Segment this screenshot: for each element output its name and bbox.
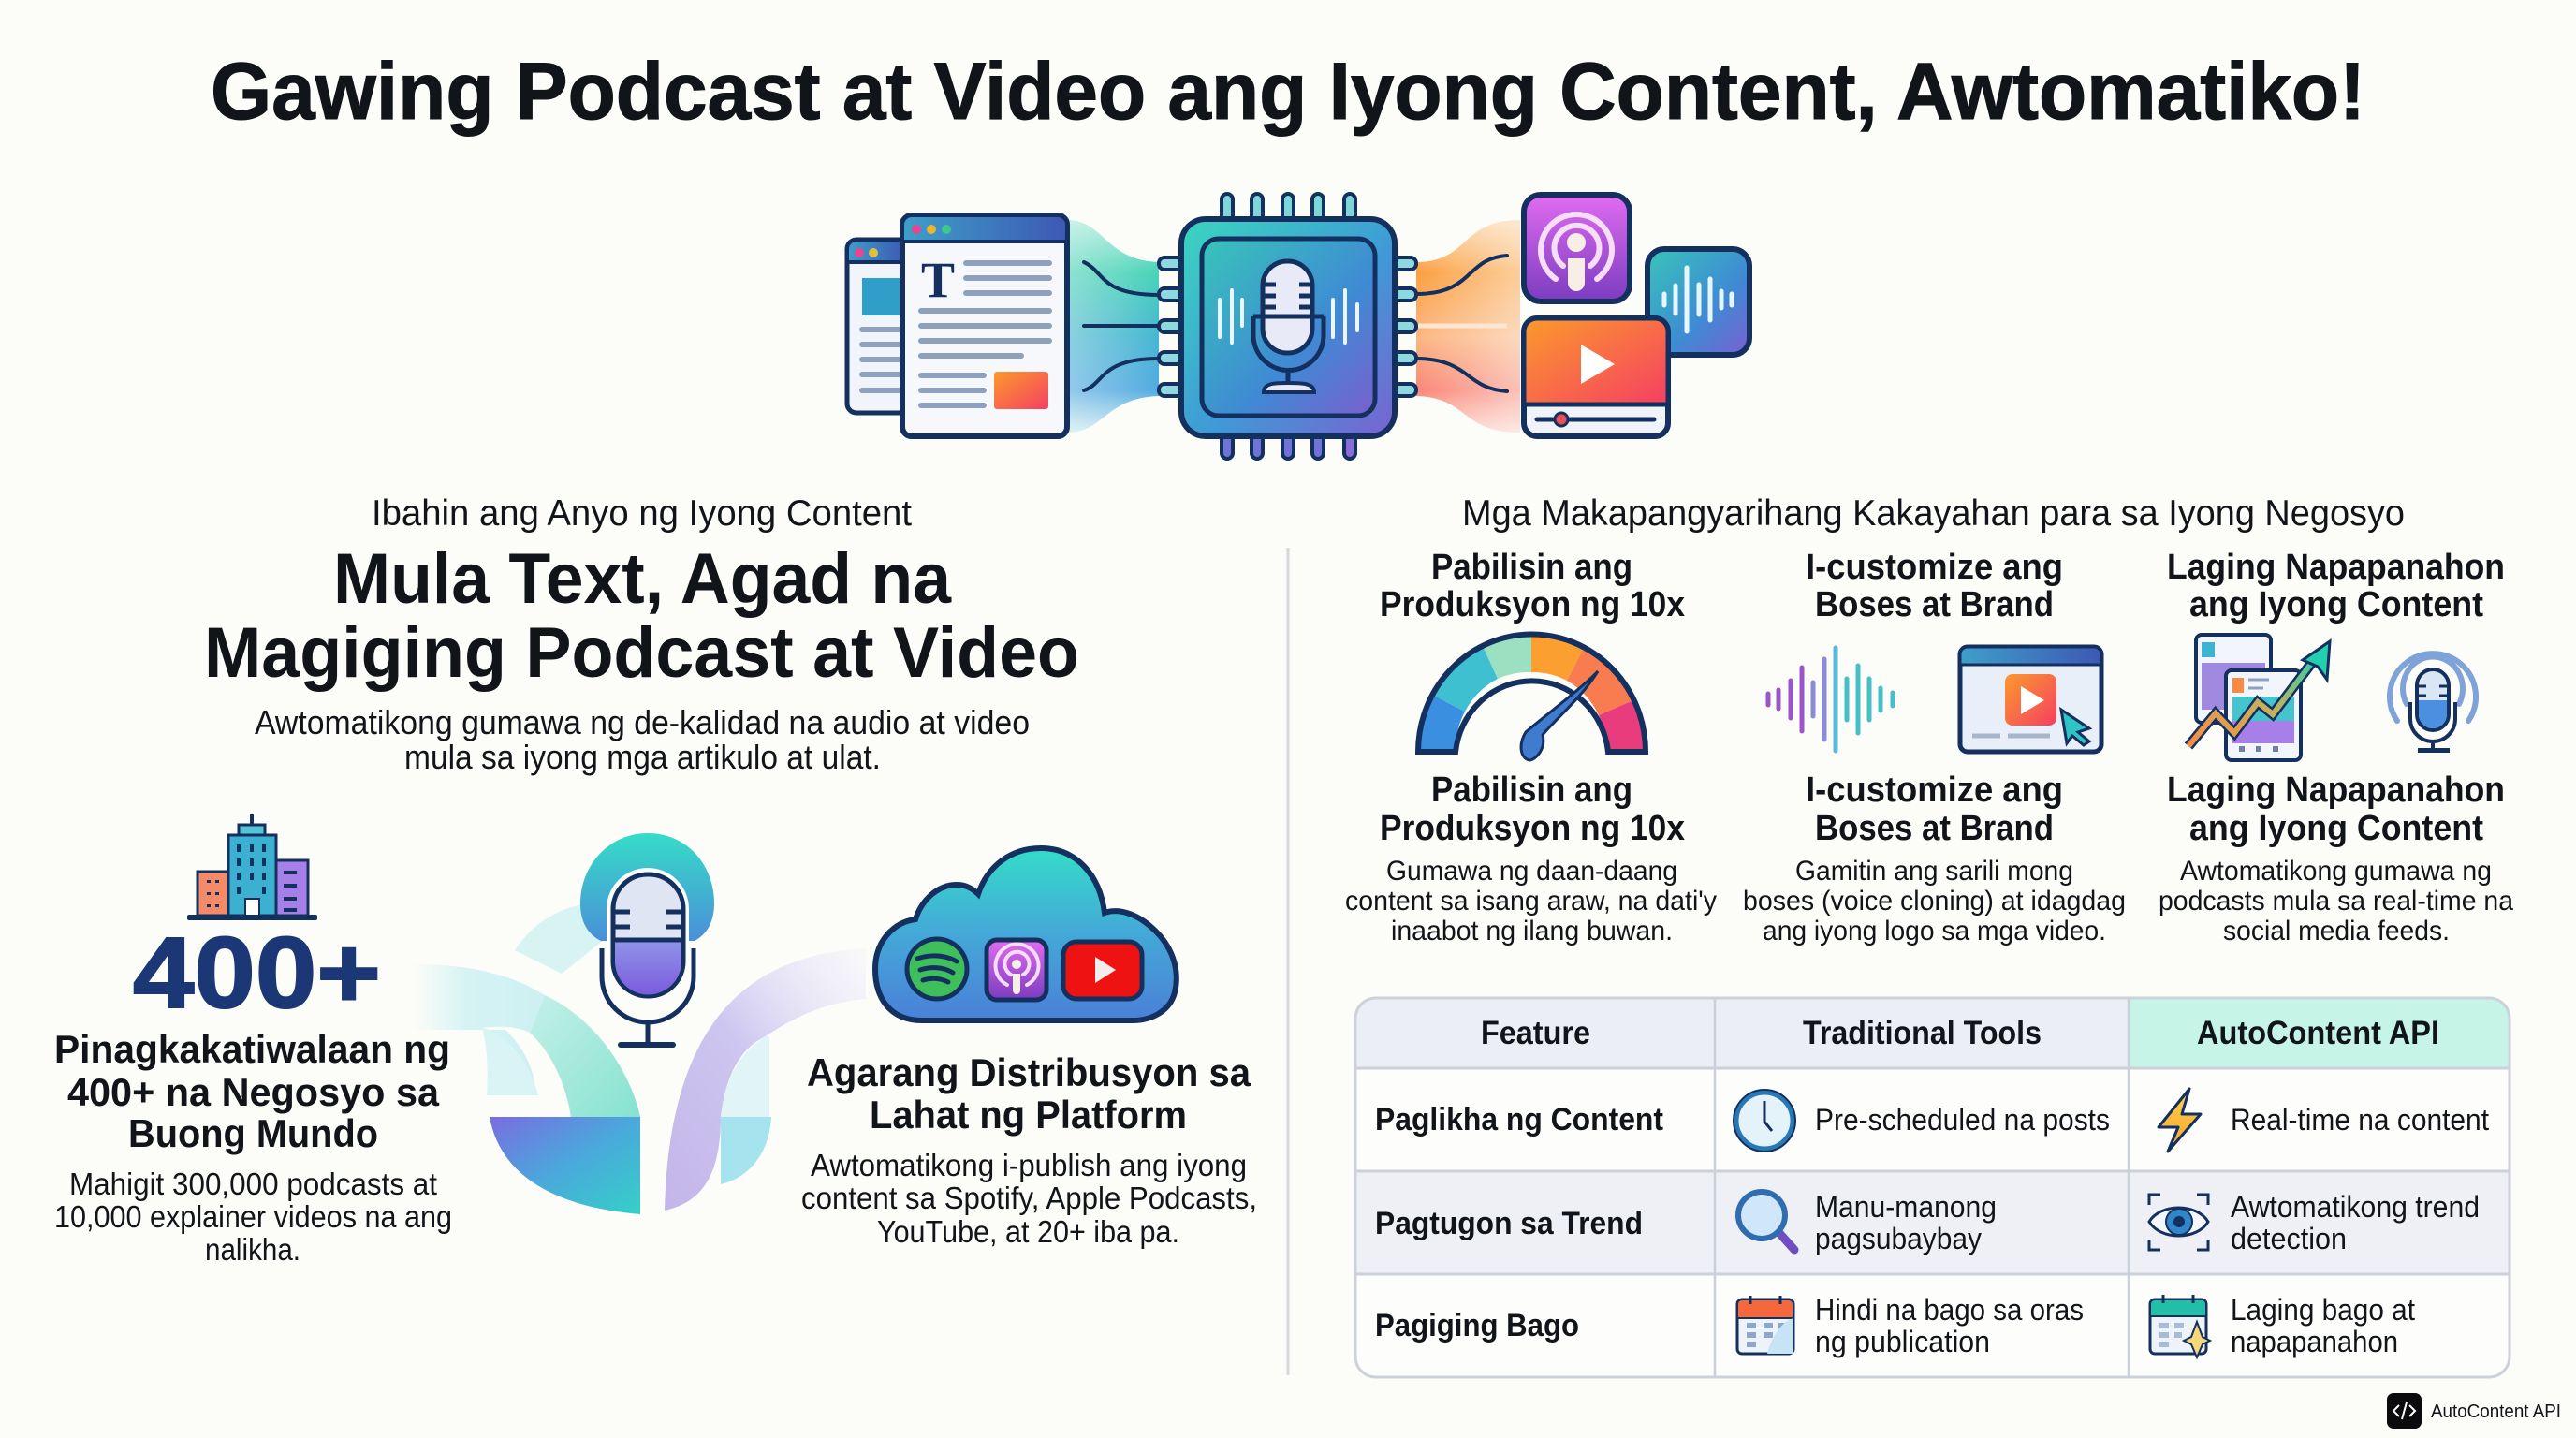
- table row: Paglikha ng Content: Pre-scheduled na posts: [1815, 1103, 2110, 1137]
- icon: audio wave tile: [1647, 249, 1749, 355]
- text block: trust heading: Pinagkakatiwalaan ng: [54, 1027, 450, 1071]
- brand badge: AutoContent API: AutoContent API: [2431, 1401, 2561, 1422]
- icon: outdated calendar: [1737, 1296, 1793, 1354]
- table row: Pagiging Bago: napapanahon: [2231, 1325, 2398, 1358]
- comparison table: [1355, 998, 2510, 1377]
- flow band: chip to outputs: [1416, 220, 1520, 433]
- text block: distribution description: content sa Spotify, Apple Podcasts,: [801, 1181, 1257, 1215]
- capability: freshness: [2159, 548, 2513, 946]
- panel: left transform section: [54, 493, 1257, 1267]
- icon: trend detection eye: [2149, 1195, 2208, 1250]
- speed lower heading: Pabilisin ang: [1431, 770, 1632, 810]
- icon: speedometer gauge: [1418, 634, 1646, 760]
- icon: front article document: [902, 215, 1067, 436]
- table row: Pagiging Bago: ng publication: [1815, 1325, 1990, 1358]
- freshness lower heading: [2167, 770, 2505, 848]
- section heading: Mula Text, Agad na: [333, 539, 952, 619]
- speed top heading: [1380, 548, 1685, 624]
- icon: clock: [1734, 1090, 1795, 1152]
- icon: front article document: T: [921, 252, 955, 308]
- customization top heading: [1806, 548, 2063, 624]
- freshness description: [2159, 856, 2513, 946]
- connector lines left: [1084, 262, 1159, 390]
- table row: Paglikha ng Content: [1375, 1089, 2489, 1152]
- capability: customization: [1743, 548, 2126, 946]
- speed lower heading: [1380, 770, 1685, 848]
- table row: Pagtugon sa Trend: [1375, 1190, 2480, 1255]
- section heading: [204, 539, 1079, 693]
- table row: Paglikha ng Content: Real-time na content: [2231, 1103, 2489, 1137]
- section kicker: Ibahin ang Anyo ng Iyong Content: [372, 493, 912, 534]
- freshness top heading: ang Iyong Content: [2189, 585, 2483, 624]
- table row: Pagtugon sa Trend: pagsubaybay: [1815, 1222, 1982, 1255]
- customization top heading: I-customize ang: [1806, 548, 2063, 587]
- icon: video player: [1524, 318, 1668, 436]
- freshness description: social media feeds.: [2223, 916, 2450, 946]
- icon: voice waveform: [1768, 648, 1893, 751]
- customization description: boses (voice cloning) at idagdag: [1743, 886, 2126, 917]
- connector lines right: [1416, 256, 1507, 391]
- customization lower heading: I-customize ang: [1806, 770, 2063, 810]
- table row: Pagtugon sa Trend: Pagtugon sa Trend: [1375, 1206, 1643, 1241]
- customization top heading: Boses at Brand: [1815, 585, 2054, 624]
- speed description: [1345, 856, 1717, 946]
- text block: trust description: [54, 1167, 452, 1267]
- table header row: [1481, 1015, 2439, 1051]
- section heading: Mga Makapangyarihang Kakayahan para sa Iyong Negosyo: [1462, 493, 2405, 534]
- customization description: [1743, 856, 2126, 946]
- speed description: inaabot ng ilang buwan.: [1391, 916, 1673, 946]
- section heading: Magiging Podcast at Video: [204, 613, 1079, 693]
- text block: distribution description: YouTube, at 20+ iba pa.: [877, 1214, 1179, 1249]
- freshness top heading: Laging Napapanahon: [2167, 548, 2505, 587]
- freshness description: podcasts mula sa real-time na: [2159, 886, 2513, 917]
- title: Gawing Podcast at Video ang Iyong Content, Awtomatiko!: [211, 47, 2365, 137]
- icon: office buildings: [187, 814, 317, 920]
- panel: right capabilities section: [1345, 493, 2513, 1377]
- hero illustration: text to podcast and video processor: [847, 194, 1749, 459]
- freshness lower heading: Laging Napapanahon: [2167, 770, 2505, 810]
- icon: fresh calendar with sparkle: [2150, 1295, 2210, 1357]
- text block: trust heading: Buong Mundo: [128, 1111, 378, 1155]
- brand badge: AutoContent API: [2387, 1393, 2561, 1429]
- text block: trust heading: 400+ na Negosyo sa: [67, 1070, 440, 1114]
- freshness description: Awtomatikong gumawa ng: [2180, 856, 2492, 887]
- text block: trust description: nalikha.: [205, 1232, 300, 1267]
- freshness top heading: [2167, 548, 2505, 624]
- icon: podcast app tile: [1524, 195, 1630, 301]
- icon: magnifying glass: [1738, 1192, 1794, 1250]
- icon: spotify: [907, 939, 967, 999]
- text block: distribution description: Awtomatikong i-publish ang iyong: [811, 1148, 1247, 1182]
- icon: back document: [847, 240, 913, 413]
- icon: lightning bolt: [2159, 1089, 2201, 1152]
- flow band: documents to chip: [1067, 220, 1159, 433]
- icon: branded video window: [1960, 647, 2101, 752]
- text block: distribution description: [801, 1148, 1257, 1249]
- section description: mula sa iyong mga artikulo at ulat.: [404, 738, 881, 776]
- speed lower heading: Produksyon ng 10x: [1380, 809, 1685, 848]
- customization description: Gamitin ang sarili mong: [1795, 856, 2073, 887]
- speed top heading: Pabilisin ang: [1431, 548, 1632, 587]
- table row: Paglikha ng Content: Paglikha ng Content: [1375, 1102, 1663, 1137]
- text block: trust heading: [54, 1027, 450, 1155]
- text block: distribution heading: Agarang Distribusyon sa: [807, 1050, 1251, 1094]
- table row: Pagtugon sa Trend: detection: [2231, 1222, 2347, 1255]
- text block: trust description: Mahigit 300,000 podcasts at: [69, 1167, 437, 1201]
- section description: Awtomatikong gumawa ng de-kalidad na audio at video: [255, 703, 1030, 741]
- capability: speed: [1345, 548, 1717, 946]
- speed top heading: Produksyon ng 10x: [1380, 585, 1685, 624]
- icon: social feeds with trend arrow: [2188, 635, 2330, 760]
- table header row: AutoContent API: [2197, 1015, 2439, 1051]
- table row: Pagiging Bago: [1375, 1293, 2415, 1358]
- table row: Pagiging Bago: Pagiging Bago: [1375, 1308, 1579, 1343]
- freshness lower heading: ang Iyong Content: [2189, 809, 2483, 848]
- customization lower heading: Boses at Brand: [1815, 809, 2054, 848]
- table header row: Feature: [1481, 1015, 1590, 1051]
- customization description: ang iyong logo sa mga video.: [1763, 916, 2106, 946]
- icon: broadcasting microphone: [2390, 653, 2476, 753]
- text block: distribution heading: [807, 1050, 1251, 1137]
- table row: Pagtugon sa Trend: Awtomatikong trend: [2231, 1190, 2480, 1224]
- table header row: Traditional Tools: [1803, 1015, 2042, 1051]
- statistic: 400+: 400+: [133, 916, 381, 1029]
- illustration: microphone with flowing arcs: [412, 833, 866, 1214]
- table row: Pagtugon sa Trend: Manu-manong: [1815, 1190, 1997, 1224]
- icon: cloud with platform logos: [875, 848, 1177, 1020]
- text block: distribution heading: Lahat ng Platform: [870, 1093, 1187, 1137]
- text block: trust description: 10,000 explainer videos na ang: [54, 1199, 452, 1234]
- icon: apple podcasts: [987, 940, 1046, 1000]
- table row: Pagiging Bago: Laging bago at: [2231, 1293, 2415, 1327]
- speed description: Gumawa ng daan-daang: [1386, 856, 1677, 887]
- processor chip with microphone: [1159, 194, 1416, 459]
- speed description: content sa isang araw, na dati'y: [1345, 886, 1717, 917]
- table row: Pagiging Bago: Hindi na bago sa oras: [1815, 1293, 2084, 1327]
- customization lower heading: [1806, 770, 2063, 848]
- icon: youtube: [1063, 942, 1142, 999]
- section description: [255, 703, 1030, 776]
